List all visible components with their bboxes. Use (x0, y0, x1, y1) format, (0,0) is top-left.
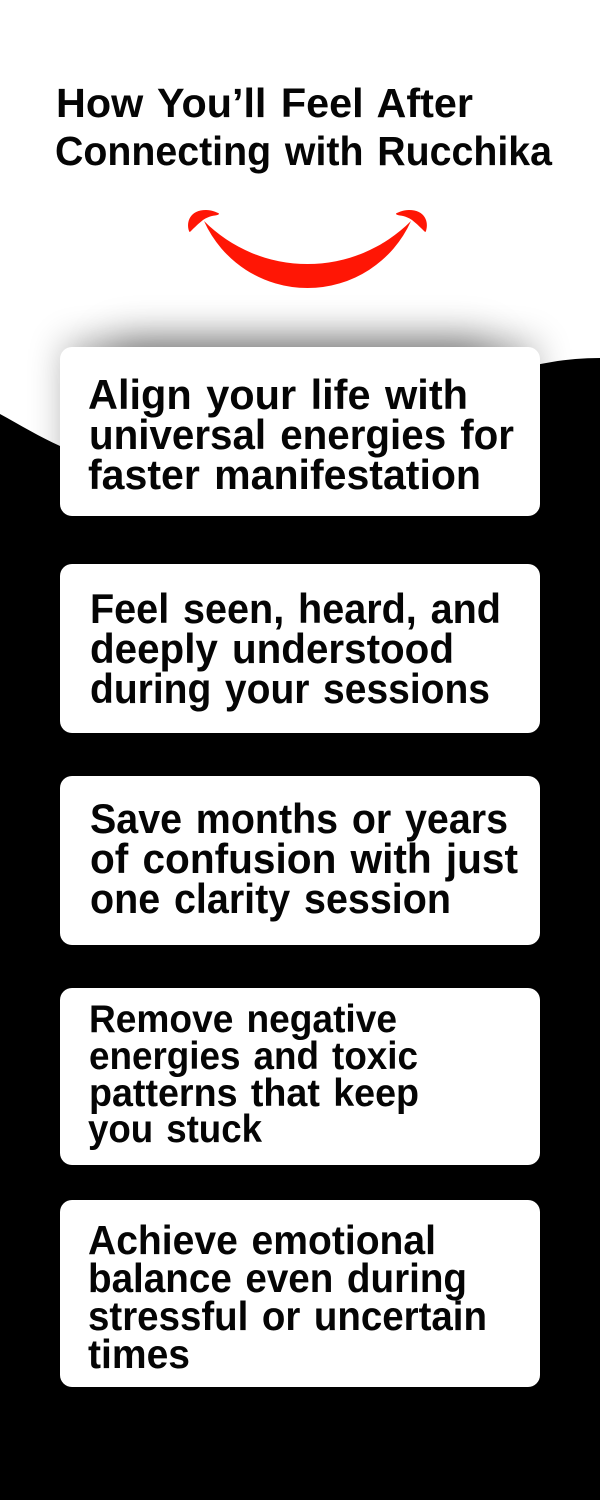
card 5: balance even during (88, 1255, 467, 1301)
card 2 (60, 564, 540, 733)
card 3 (60, 776, 540, 945)
card 3: one clarity session (90, 875, 451, 922)
card 5: stressful or uncertain (88, 1293, 487, 1339)
card 4: Remove negative (89, 998, 397, 1041)
card 1: faster manifestation (88, 451, 481, 498)
title: Connecting with Rucchika (55, 128, 553, 174)
card 4: energies and toxic (89, 1035, 418, 1078)
card 2: during your sessions (90, 665, 490, 712)
card 1 (60, 347, 540, 516)
title: How You’ll Feel After (56, 80, 473, 126)
card 2: Feel seen, heard, and (90, 585, 501, 632)
black wave background (0, 358, 600, 1500)
card 2: deeply understood (90, 625, 454, 672)
card 4 (60, 988, 540, 1165)
card 3: of confusion with just (90, 835, 518, 882)
title (55, 80, 553, 174)
card 5: times (88, 1331, 190, 1377)
card 5: Achieve emotional (88, 1217, 436, 1263)
card 1: Align your life with (88, 371, 468, 418)
card 5 (60, 1200, 540, 1387)
card 4: patterns that keep (89, 1072, 419, 1115)
card 1 shadow (65, 341, 535, 503)
card 3: Save months or years (90, 795, 508, 842)
card 4: you stuck (88, 1108, 262, 1151)
icon: red smile (188, 210, 427, 288)
card 1: universal energies for (89, 411, 514, 458)
